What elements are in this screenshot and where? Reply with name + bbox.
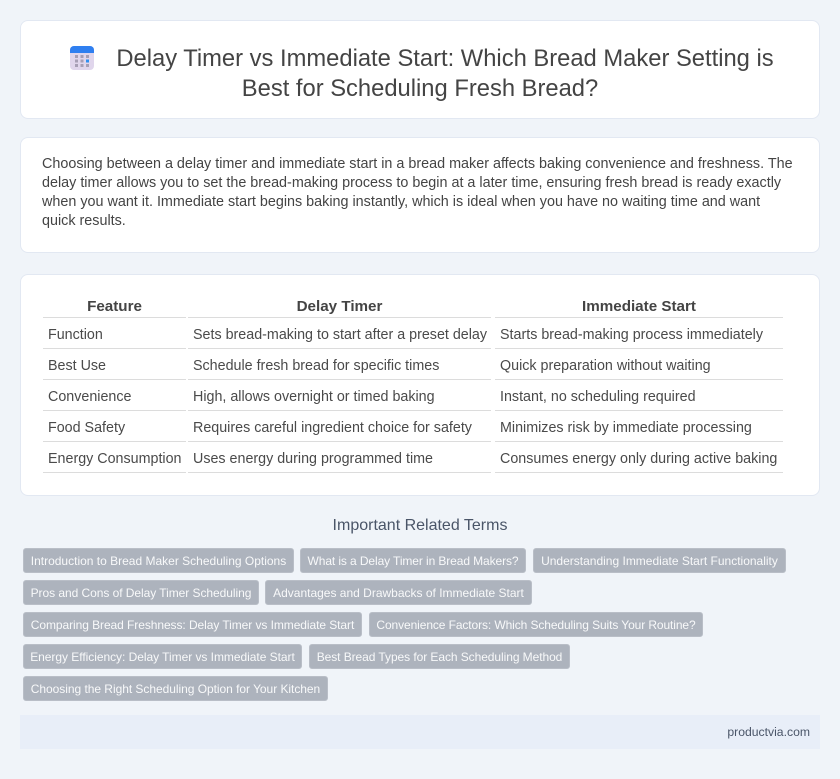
tag list: related terms: Energy Efficiency: Delay Timer vs Immediate Start bbox=[30, 650, 295, 664]
table: comparison: Energy Consumption bbox=[48, 451, 182, 467]
text block: intro paragraph: quick results. bbox=[42, 213, 126, 229]
tag list: related terms: Best Bread Types for Each Scheduling Method bbox=[317, 650, 562, 664]
table: comparison: Consumes energy only during active baking bbox=[500, 451, 777, 467]
text block: intro paragraph: delay timer allows you to set the bread-making process to begin at a later time, ensuring fresh bread is ready exactly bbox=[42, 175, 781, 191]
table: comparison: Schedule fresh bread for specific times bbox=[193, 358, 439, 374]
text block: intro paragraph bbox=[42, 156, 793, 229]
tag list: related terms: What is a Delay Timer in Bread Makers? bbox=[308, 554, 518, 568]
heading: title bbox=[116, 45, 774, 102]
table: comparison: Delay Timer bbox=[297, 298, 382, 315]
heading: title: Delay Timer vs Immediate Start: Which Bread Maker Setting is bbox=[116, 45, 774, 72]
tag list: related terms: Understanding Immediate Start Functionality bbox=[541, 554, 778, 568]
table: comparison: Uses energy during programmed time bbox=[193, 451, 433, 467]
table: comparison: Feature bbox=[87, 298, 142, 315]
table: comparison: Function bbox=[48, 327, 103, 343]
panel: intro text bbox=[20, 137, 820, 253]
tag list: related terms: Convenience Factors: Which Scheduling Suits Your Routine? bbox=[376, 618, 696, 632]
text block: intro paragraph: Choosing between a delay timer and immediate start in a bread maker affects baking convenience and freshness. The bbox=[42, 156, 793, 172]
table: comparison: Immediate Start bbox=[582, 298, 696, 315]
table: comparison: High, allows overnight or timed baking bbox=[193, 389, 435, 405]
table: comparison: Requires careful ingredient choice for safety bbox=[193, 420, 472, 436]
table: comparison: Sets bread-making to start after a preset delay bbox=[193, 327, 487, 343]
tag list: related terms: Advantages and Drawbacks of Immediate Start bbox=[273, 586, 524, 600]
tag list: related terms: Choosing the Right Scheduling Option for Your Kitchen bbox=[31, 682, 320, 696]
table: comparison: Minimizes risk by immediate processing bbox=[500, 420, 752, 436]
tag list: related terms: Introduction to Bread Maker Scheduling Options bbox=[31, 554, 286, 568]
panel: title header bbox=[20, 20, 820, 119]
footer: source: productvia.com bbox=[727, 725, 810, 739]
table: comparison: Food Safety bbox=[48, 420, 125, 436]
footer bar bbox=[20, 715, 820, 749]
table: comparison bbox=[43, 298, 783, 473]
table: comparison: Convenience bbox=[48, 389, 131, 405]
heading: important related terms: Important Related Terms bbox=[333, 517, 507, 534]
tag list: related terms: Comparing Bread Freshness: Delay Timer vs Immediate Start bbox=[31, 618, 354, 632]
icon: calendar bbox=[70, 46, 94, 70]
table: comparison: Instant, no scheduling required bbox=[500, 389, 696, 405]
table: comparison: Starts bread-making process immediately bbox=[500, 327, 763, 343]
tag list: related terms: Pros and Cons of Delay Timer Scheduling bbox=[31, 586, 251, 600]
table: comparison: Quick preparation without waiting bbox=[500, 358, 711, 374]
heading: title: Best for Scheduling Fresh Bread? bbox=[242, 75, 598, 102]
tag list: related terms bbox=[23, 548, 786, 701]
text block: intro paragraph: when you want it. Immediate start begins baking instantly, which is ideal when you have no waiting time and want bbox=[42, 194, 760, 210]
panel: comparison table bbox=[20, 274, 820, 496]
table: comparison: Best Use bbox=[48, 358, 106, 374]
